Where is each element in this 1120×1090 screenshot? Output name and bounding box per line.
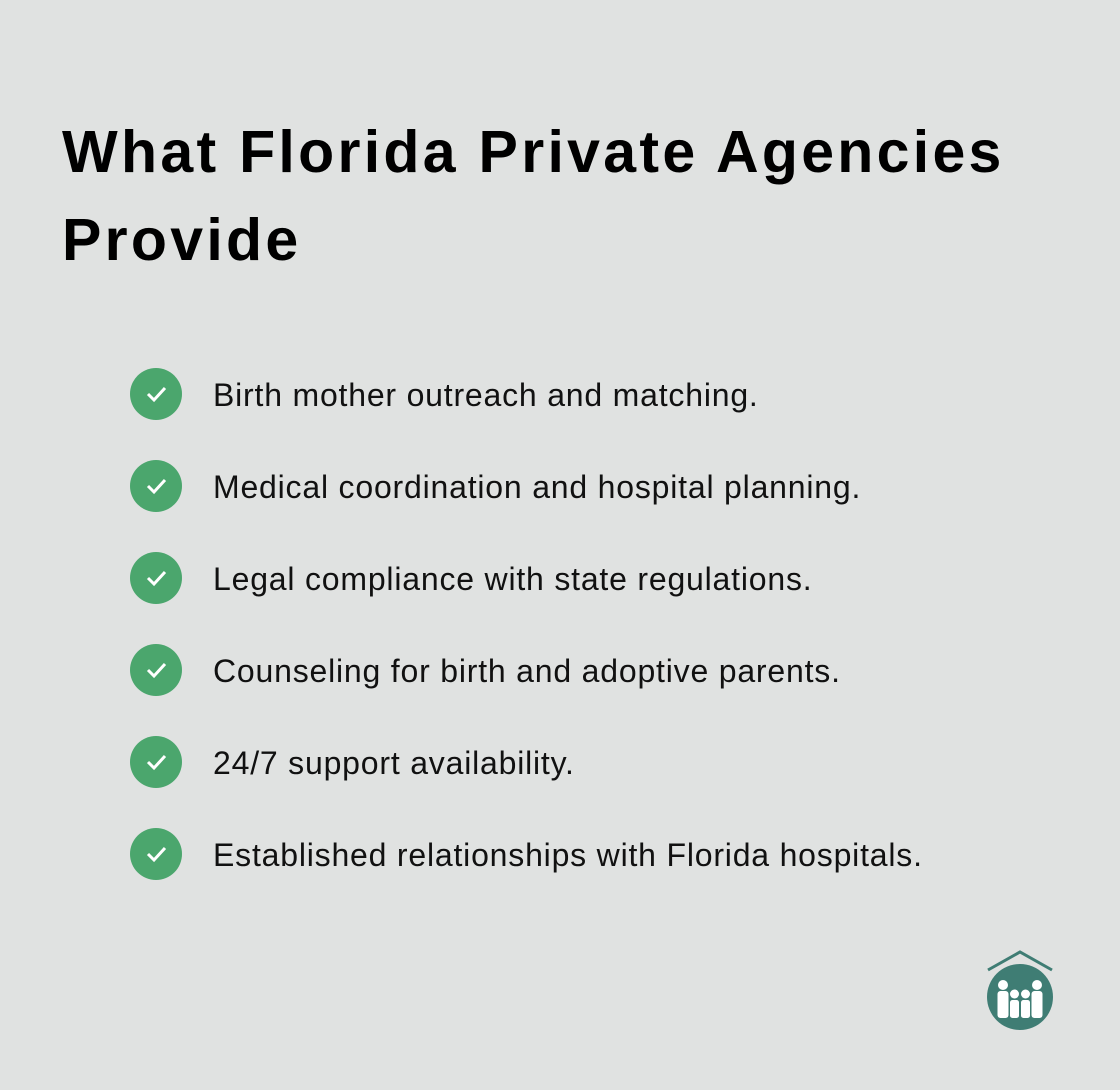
item: legal compliance bbox=[130, 552, 812, 604]
item: hospital relationships: Established relationships with Florida hospitals. bbox=[213, 837, 923, 873]
item: medical coordination bbox=[130, 460, 861, 512]
item: 24/7 support: 24/7 support availability. bbox=[213, 745, 575, 781]
item: birth mother outreach bbox=[130, 368, 759, 420]
icon: logo family house bbox=[987, 950, 1053, 1030]
item: hospital relationships bbox=[130, 828, 923, 880]
item: counseling bbox=[130, 644, 841, 696]
item: 24/7 support bbox=[130, 736, 575, 788]
item: medical coordination: Medical coordination and hospital planning. bbox=[213, 469, 861, 505]
item: birth mother outreach: Birth mother outreach and matching. bbox=[213, 377, 759, 413]
title: What Florida Private Agencies bbox=[62, 119, 1005, 185]
item: counseling: Counseling for birth and adoptive parents. bbox=[213, 653, 841, 689]
title bbox=[62, 119, 1005, 273]
item: legal compliance: Legal compliance with state regulations. bbox=[213, 561, 812, 597]
title: Provide bbox=[62, 207, 302, 273]
